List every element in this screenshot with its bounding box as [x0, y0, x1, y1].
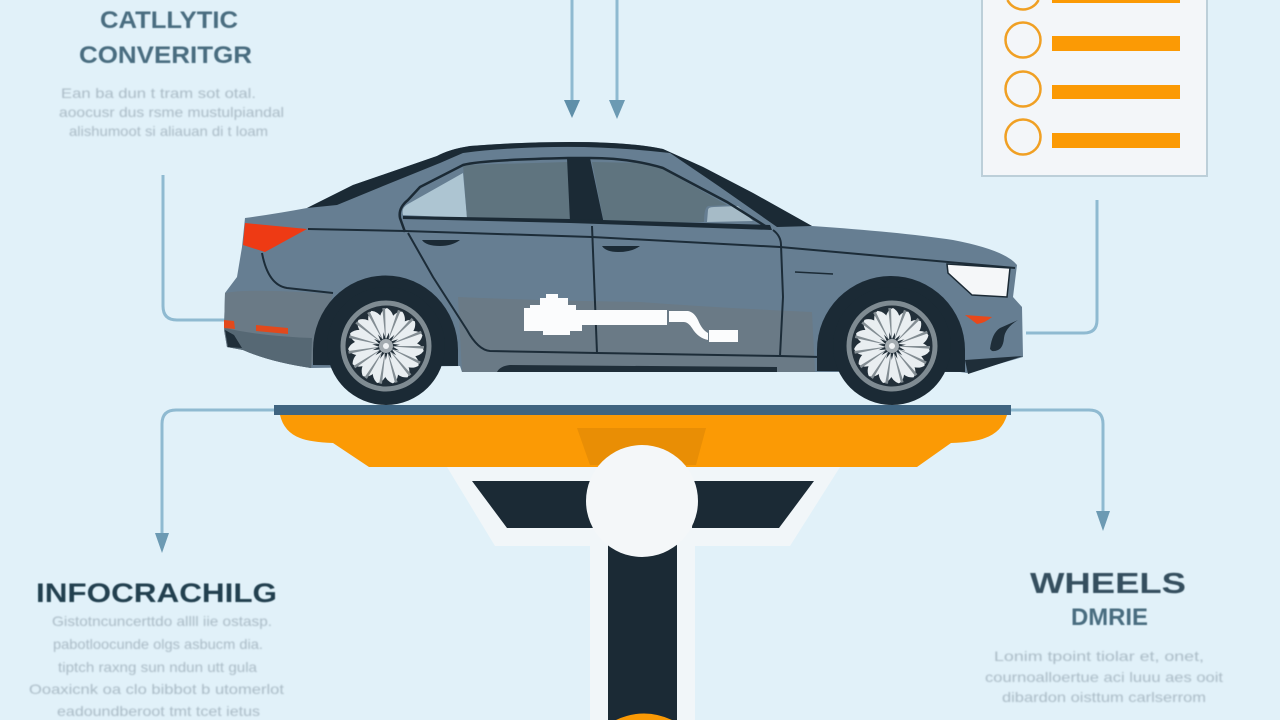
- heading and text: infographic: Ooaxicnk oa clo bibbot b utomerlot: [29, 681, 284, 697]
- front wheel arch: [817, 276, 965, 372]
- platform top bar: [274, 405, 1011, 415]
- B pillar: [567, 158, 604, 224]
- heading and text: infographic: pabotloocunde olgs asbucm dia.: [53, 636, 263, 652]
- arrow: top left: [564, 0, 580, 118]
- rear wheel: [327, 287, 445, 405]
- right lift arm: [692, 481, 814, 528]
- checklist panel: [982, 0, 1207, 176]
- platform shadow: [577, 428, 706, 465]
- car body: [224, 142, 1023, 373]
- air intake: [990, 320, 1018, 351]
- left lift arm: [472, 481, 593, 528]
- lift pivot: [586, 445, 698, 557]
- lift orange platform: [280, 415, 1007, 467]
- heading and text: catalytic converter: aoocusr dus rsme mustulpiandal: [59, 104, 284, 120]
- arrow: lift to wheels text: [1010, 410, 1110, 531]
- rear quarter window: [403, 173, 467, 218]
- heading and text: catalytic converter: CONVERITGR: [79, 42, 252, 69]
- sill: [497, 365, 777, 372]
- heading and text: catalytic converter: alishumoot si aliauan di t loam: [69, 123, 268, 139]
- front wheel: [833, 287, 951, 405]
- heading and text: wheels: WHEELS: [1030, 568, 1186, 600]
- body lines: [262, 226, 1015, 357]
- orange base dot: [616, 714, 672, 720]
- rear bumper shade: [225, 328, 312, 368]
- heading and text: wheels: Lonim tpoint tiolar et, onet,: [994, 648, 1204, 664]
- lower body shade: [224, 291, 815, 372]
- front bumper lower: [965, 356, 1023, 374]
- arrow: top right: [609, 0, 625, 119]
- rear wheel arch: [313, 275, 458, 366]
- front side window: [592, 162, 727, 223]
- heading and text: catalytic converter: Ean ba dun t tram sot otal.: [61, 85, 256, 101]
- lift white halo: [447, 467, 840, 720]
- heading and text: wheels: cournoalloertue aci luuu aes ooit: [985, 669, 1223, 685]
- heading and text: infographic: eadoundberoot tmt tcet ietus: [57, 703, 260, 719]
- front marker: [965, 315, 992, 324]
- heading and text: infographic: Gistotncuncerttdo allll iie ostasp.: [52, 613, 272, 629]
- tail light: [243, 223, 307, 252]
- connector: checklist to car: [1026, 200, 1097, 333]
- arrow: lift to infographic text: [155, 410, 275, 553]
- headlight: [947, 264, 1010, 297]
- heading and text: wheels: DMRIE: [1071, 604, 1148, 631]
- lift column: [608, 540, 677, 720]
- heading and text: catalytic converter: [59, 7, 284, 139]
- window sill: [403, 216, 772, 230]
- heading and text: infographic: [29, 578, 284, 719]
- lift: [274, 405, 1011, 720]
- heading and text: catalytic converter: CATLLYTIC: [100, 7, 238, 34]
- rear bumper dark: [225, 330, 242, 348]
- heading and text: wheels: dibardon oisttum carlserrom: [1002, 689, 1206, 705]
- door handles: [422, 240, 640, 252]
- connector: catalytic converter to car: [163, 175, 226, 320]
- heading and text: wheels: [985, 568, 1223, 705]
- window frame: [400, 158, 770, 232]
- rear side window: [463, 162, 570, 220]
- car: [224, 142, 1023, 405]
- heading and text: infographic: tiptch raxng sun ndun utt gula: [58, 659, 257, 675]
- roof dark band: [307, 142, 812, 227]
- rear markers: [224, 320, 288, 334]
- heading and text: infographic: INFOCRACHILG: [36, 578, 277, 608]
- mirror: [707, 206, 753, 222]
- catalytic converter exhaust system: [524, 294, 738, 342]
